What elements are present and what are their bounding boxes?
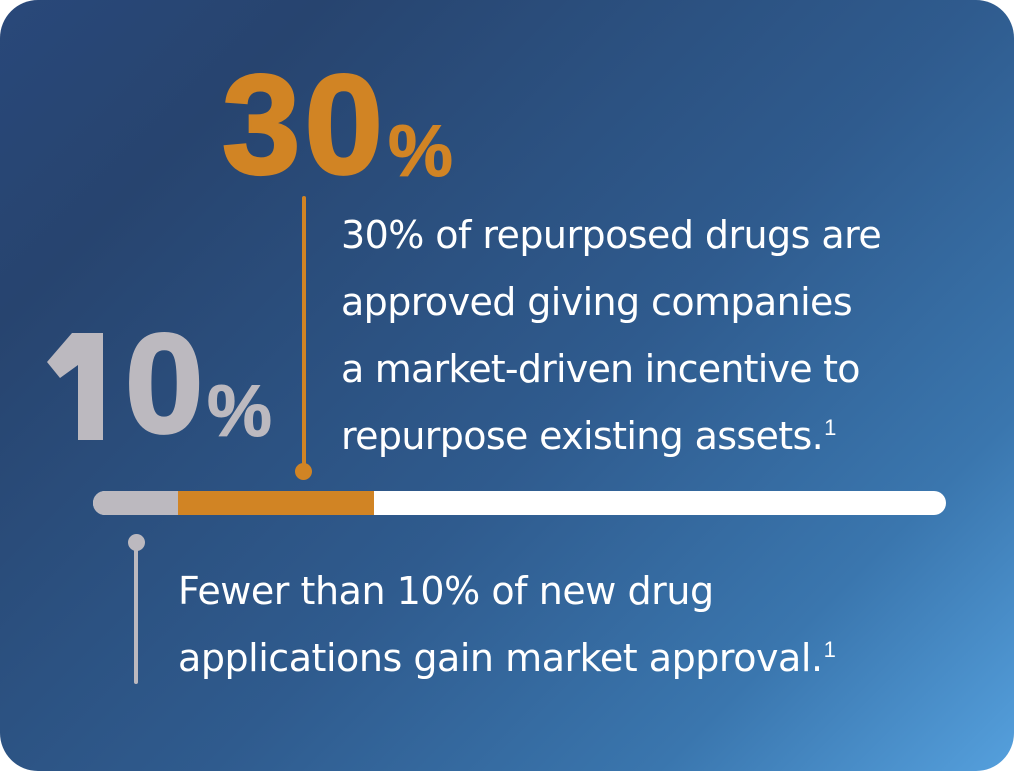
stat: 10%: 0: [125, 304, 203, 462]
connector: orange marker: [295, 196, 312, 480]
stat: 30%: 0: [304, 45, 383, 203]
stat: 10%: %: [207, 371, 272, 452]
text block: new drug applications: Fewer than 10% of new drug: [178, 569, 714, 613]
text block: repurposed drugs: repurpose existing assets.1: [341, 414, 836, 458]
progress bar: [93, 491, 946, 515]
stat: 30%: 3: [222, 45, 300, 203]
stat: 30%: %: [388, 111, 453, 192]
text block: repurposed drugs: [341, 213, 881, 458]
text block: repurposed drugs: approved giving companies: [341, 280, 852, 324]
connector: grey marker: [128, 534, 145, 684]
stat: 10%: [47, 304, 272, 462]
stat: 10%: 1: [49, 304, 127, 462]
text block: repurposed drugs: a market-driven incentive to: [341, 347, 860, 391]
stat: 30%: [222, 45, 453, 203]
text block: new drug applications: applications gain market approval.1: [178, 636, 836, 680]
text block: repurposed drugs: 30% of repurposed drugs are: [341, 213, 881, 257]
text block: new drug applications: [178, 569, 836, 680]
